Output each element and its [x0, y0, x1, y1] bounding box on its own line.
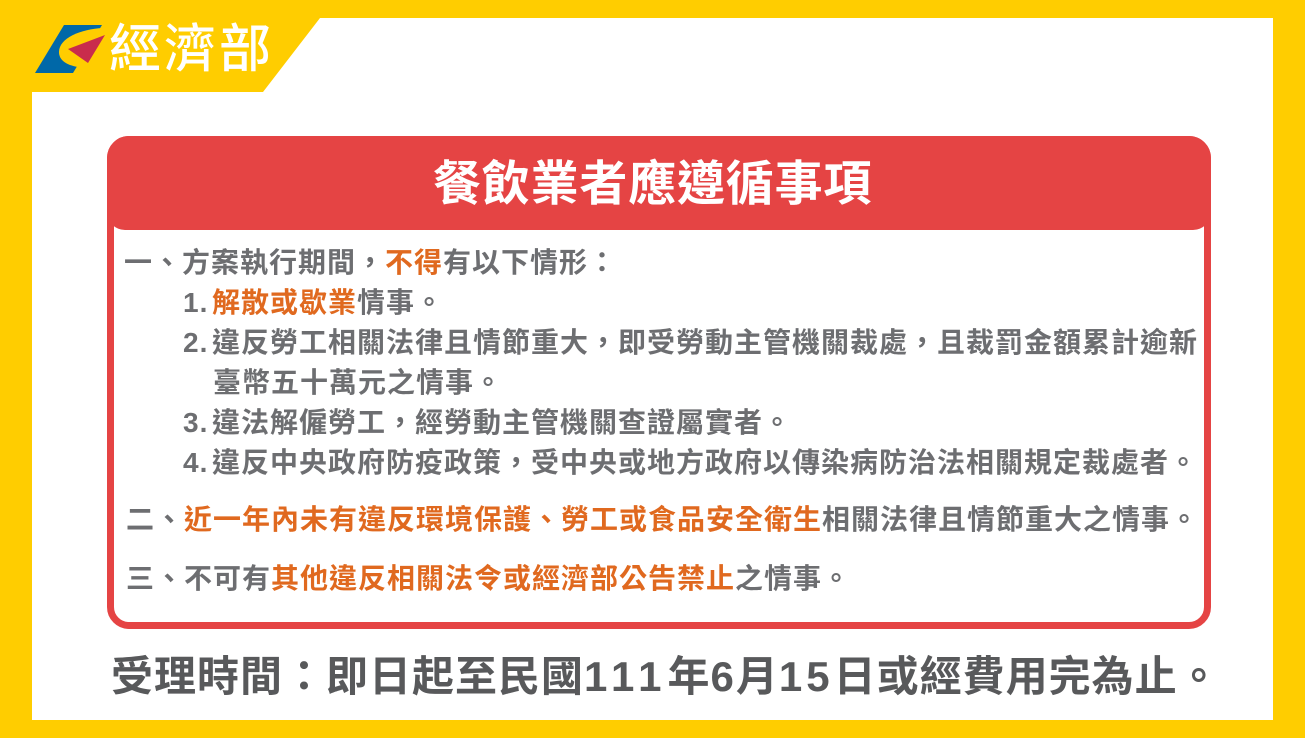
item 3: 3.	[183, 407, 208, 438]
header tab	[32, 18, 320, 92]
section 3: 三、不可有其他違反相關法令或經濟部公告禁止之情事。	[126, 563, 851, 594]
item 2 continued: 臺幣五十萬元之情事。	[213, 367, 503, 398]
text: 違法解僱勞工，經勞動主管機關查證屬實者。	[212, 407, 792, 438]
item 4	[183, 447, 1198, 478]
item 4: 4.	[183, 447, 208, 478]
text: 違反勞工相關法律且情節重大，即受勞動主管機關裁處，且裁罰金額累計逾新	[212, 327, 1198, 358]
title: 餐飲業者應遵循事項	[433, 158, 872, 211]
panel header	[107, 136, 1211, 230]
application period: 受理時間：即日起至民國111年6月15日或經費用完為止。	[111, 653, 1221, 700]
text: 解散或歇業情事。	[212, 287, 444, 318]
text: 違反中央政府防疫政策，受中央或地方政府以傳染病防治法相關規定裁處者。	[212, 447, 1198, 478]
item 3	[183, 407, 792, 438]
item 2: 2.	[183, 327, 208, 358]
item 1	[183, 287, 444, 318]
panel: requirements	[107, 136, 1211, 629]
section 1 heading: 一、方案執行期間，不得有以下情形：	[124, 247, 617, 278]
icon: ministry logo	[35, 25, 105, 73]
item 1: 1.	[183, 287, 208, 318]
logo text: 經濟部	[109, 21, 274, 79]
item 2	[183, 327, 1198, 358]
section 2: 二、近一年內未有違反環境保護、勞工或食品安全衛生相關法律且情節重大之情事。	[126, 504, 1199, 535]
